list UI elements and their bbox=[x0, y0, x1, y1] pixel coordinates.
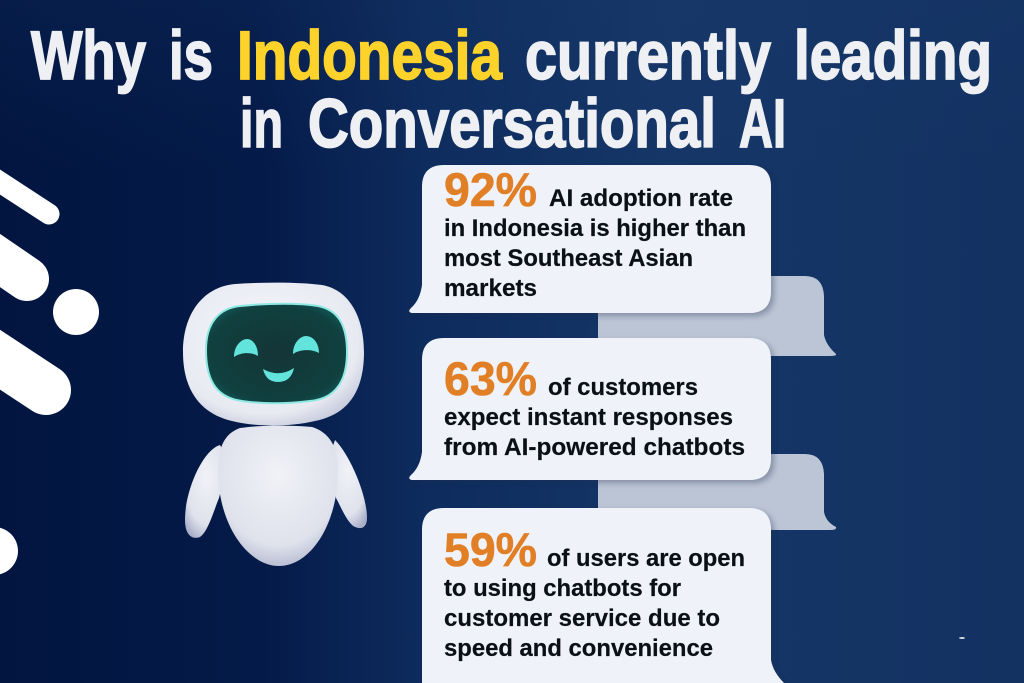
panel: 59% bubble bbox=[422, 508, 784, 683]
title line 1: Indonesia bbox=[237, 17, 503, 94]
icon: robot mascot bbox=[183, 283, 367, 566]
text: of users are open: of users are open bbox=[547, 545, 745, 572]
text: line 2: in Indonesia is higher than bbox=[444, 215, 746, 242]
robot body bbox=[218, 426, 338, 566]
title line 1: currently bbox=[525, 17, 771, 94]
title line 2: Conversational bbox=[308, 85, 716, 162]
stat: 63%: 63% bbox=[444, 352, 537, 405]
text: line 3: most Southeast Asian bbox=[444, 245, 693, 272]
robot right eye bbox=[293, 336, 319, 354]
text: line 3: customer service due to bbox=[444, 605, 720, 632]
text: line 4: markets bbox=[444, 275, 537, 302]
bubble shape bbox=[422, 508, 784, 683]
title line 2: in bbox=[240, 85, 283, 162]
text: AI adoption rate: AI adoption rate bbox=[549, 185, 733, 212]
robot head bbox=[183, 283, 364, 426]
bubble shape bbox=[409, 338, 771, 480]
title line 1: Why bbox=[31, 17, 146, 94]
title line 1: is bbox=[169, 17, 213, 94]
grey back bubble 1 bbox=[598, 276, 836, 356]
title line 2: AI bbox=[739, 85, 786, 162]
text: line 3: from AI-powered chatbots bbox=[444, 434, 745, 461]
panel: 92% bubble bbox=[409, 163, 771, 313]
text: line 2: expect instant responses bbox=[444, 404, 733, 431]
stat: 92%: 92% bbox=[444, 163, 537, 216]
stat: 59%: 59% bbox=[444, 523, 537, 576]
robot right arm bbox=[328, 440, 367, 528]
title line 1 bbox=[31, 17, 992, 94]
robot face screen bbox=[206, 304, 347, 403]
robot left arm bbox=[185, 445, 228, 538]
robot smile bbox=[263, 368, 294, 382]
text: of customers: of customers bbox=[548, 374, 698, 401]
grey back bubble 2 bbox=[598, 454, 836, 530]
panel: 63% bubble bbox=[409, 338, 771, 480]
text: line 4: speed and convenience bbox=[444, 635, 713, 662]
title bbox=[31, 17, 992, 162]
text: line 2: to using chatbots for bbox=[444, 575, 681, 602]
decorative white strokes bbox=[0, 169, 99, 575]
robot left eye bbox=[234, 339, 258, 357]
bubble shape bbox=[409, 165, 771, 313]
